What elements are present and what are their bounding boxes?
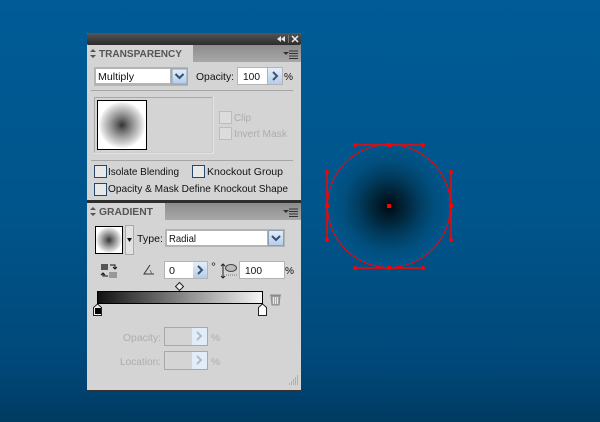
disabled opacity field: Opacity: bbox=[123, 332, 161, 344]
opacity field: % bbox=[284, 71, 293, 83]
circle bbox=[328, 144, 450, 268]
panel: transparency bbox=[90, 45, 301, 196]
blending checkboxes bbox=[94, 166, 288, 196]
angle field: 0 bbox=[169, 265, 175, 277]
disabled location field: % bbox=[211, 356, 220, 368]
disabled mask options bbox=[220, 112, 288, 140]
mask preview area bbox=[94, 97, 213, 153]
gradient stop: white bbox=[258, 304, 266, 316]
blend mode dropdown: Multiply bbox=[98, 71, 135, 83]
disabled location field: Location: bbox=[120, 356, 161, 368]
blending checkboxes: Knockout Group bbox=[207, 166, 283, 178]
panel: gradient bbox=[90, 203, 301, 384]
gradient type dropdown bbox=[137, 229, 285, 247]
angle field: ° bbox=[211, 261, 216, 273]
disabled mask options: Clip bbox=[234, 112, 251, 124]
disabled mask options: Invert Mask bbox=[234, 128, 288, 140]
aspect ratio field bbox=[221, 261, 294, 279]
gradient slider bar bbox=[98, 292, 262, 304]
transparency tab strip: TRANSPARENCY bbox=[99, 49, 182, 60]
gradient tab strip: GRADIENT bbox=[99, 207, 153, 218]
disabled location field bbox=[120, 352, 220, 370]
radial gradient circle with selection bbox=[326, 144, 452, 270]
blend mode dropdown bbox=[94, 67, 188, 86]
aspect ratio field: % bbox=[285, 265, 294, 277]
resize grip bbox=[289, 376, 298, 384]
gradient type dropdown: Type: bbox=[137, 233, 163, 245]
icon: trash bbox=[270, 295, 281, 305]
aspect ratio field: 100 bbox=[245, 265, 262, 277]
panel title bar bbox=[87, 33, 301, 45]
gradient swatch bbox=[96, 226, 134, 254]
gradient type dropdown: Radial bbox=[169, 233, 196, 245]
midpoint diamond bbox=[176, 282, 184, 290]
angle field bbox=[144, 261, 216, 279]
blending checkboxes: Opacity & Mask Define Knockout Shape bbox=[108, 183, 288, 195]
blending checkboxes: Isolate Blending bbox=[108, 166, 179, 178]
gradient tab strip bbox=[90, 203, 301, 220]
transparency tab strip bbox=[90, 45, 301, 62]
opacity field: 100 bbox=[243, 71, 260, 83]
opacity field bbox=[196, 67, 293, 85]
disabled opacity field: % bbox=[211, 332, 220, 344]
icon: reverse gradient bbox=[101, 264, 117, 278]
disabled opacity field bbox=[123, 328, 220, 346]
selection path bbox=[328, 144, 450, 268]
opacity field: Opacity: bbox=[196, 71, 234, 83]
gradient stop: black bbox=[94, 304, 102, 316]
bezier handles bbox=[326, 144, 452, 270]
panel: transparency and gradient bbox=[87, 33, 301, 391]
